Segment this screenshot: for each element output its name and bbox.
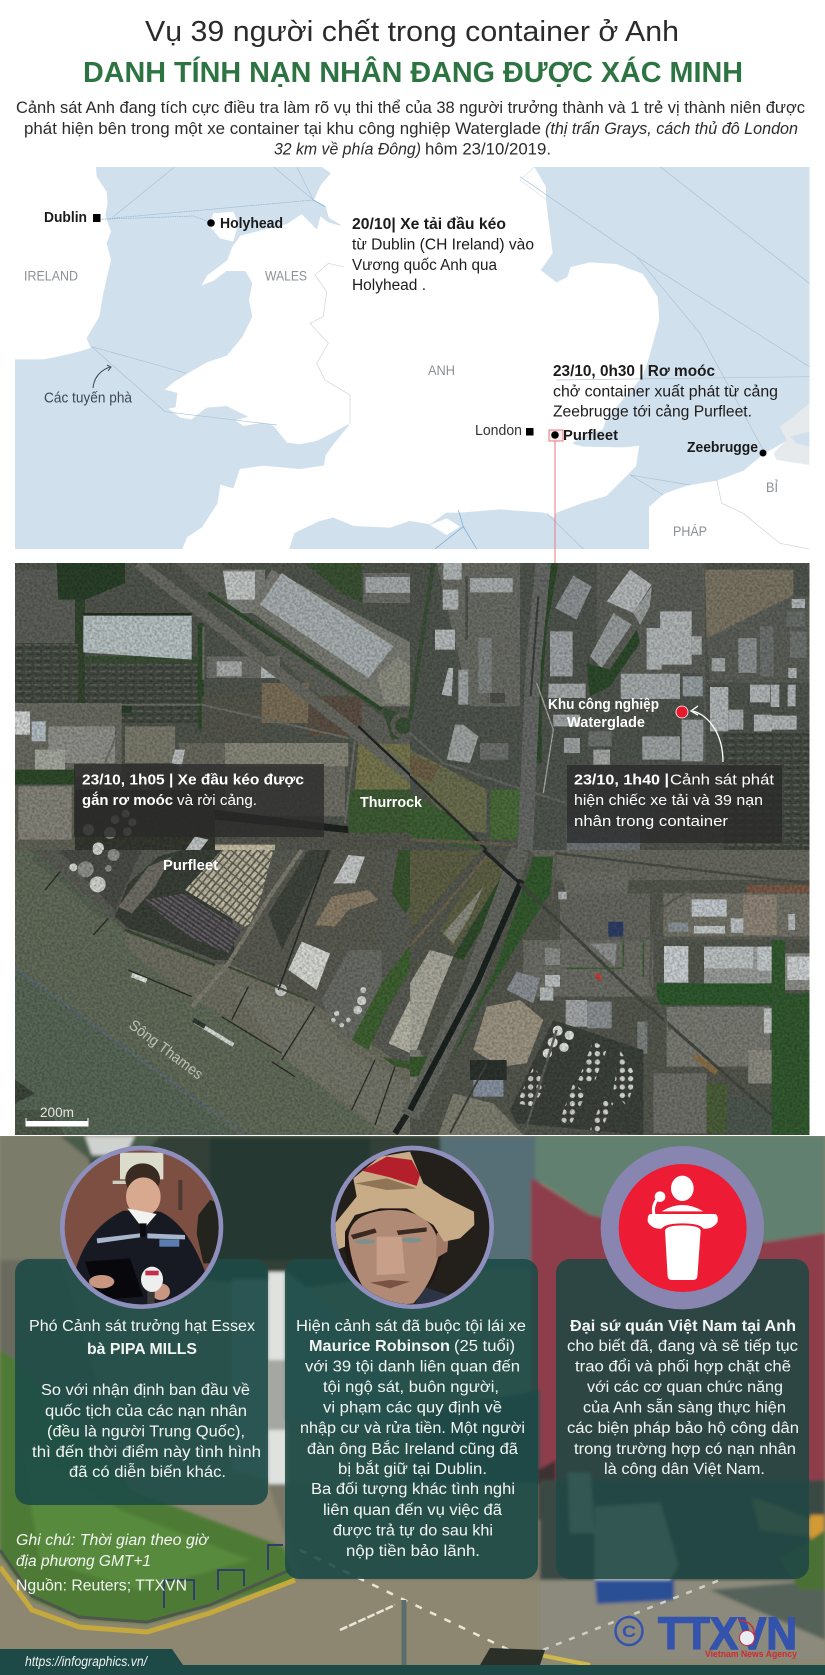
panel: driver charged: tội ngộ sát, buôn người, [323,1379,499,1396]
panel: Vietnam embassy [556,1259,809,1579]
panel: driver charged: Ba đối tượng khác tình nghi [311,1481,515,1498]
satellite imagery drawing [15,563,810,1140]
label: Dublin: Dublin [44,210,87,226]
label: England: ANH [428,362,455,378]
panel: driver charged: Maurice Robinson [309,1338,450,1355]
callout: 20/10 truck [352,216,534,294]
note and source: Nguồn: Reuters; TTXVN [16,1578,187,1594]
callout: 23/10 trailer: 23/10, 0h30 | Rơ moóc [553,363,715,380]
label: Purfleet with locator box and leader line: Purfleet [563,428,618,444]
panel: Pipa Mills statement: thì đến thời điểm này tình hình [32,1444,261,1461]
panel: driver charged [285,1259,538,1579]
label: Thurrock: Thurrock [360,794,423,811]
panel: driver charged: được trả tự do sau khi [333,1522,493,1540]
intro text block: (thị trấn Grays, cách thủ đô London [545,120,798,138]
callout: 20/10 truck: 20/10| Xe tải đầu kéo [352,216,506,233]
panel: Pipa Mills statement: Phó Cảnh sát trưởng hạt Essex [29,1318,255,1335]
panel: driver charged: (25 tuổi) [454,1338,515,1355]
label: Wales: WALES [265,268,307,284]
intro text block: hôm 23/10/2019. [425,140,551,158]
callout: 23/10 1h40 [567,765,782,843]
note and source [16,1532,210,1594]
panel: driver charged: nhập cư và rửa tiền. Một người [300,1420,525,1437]
panel: driver charged: với 39 tội danh liên quan đến [305,1358,520,1376]
label: London: London [475,423,522,439]
portrait: Pipa Mills [60,1146,223,1310]
panel: driver charged: liên quan đến vụ việc đã [323,1502,502,1519]
panel: Pipa Mills statement: đã có diễn biến khác. [69,1464,226,1481]
panel: driver charged: đàn ông Bắc Ireland cũng đã [307,1441,518,1458]
panel: Pipa Mills statement: So với nhận định ban đầu về [41,1382,250,1399]
label: Holyhead: Holyhead [220,216,283,232]
intro text block: 32 km về phía Đông) [274,140,421,158]
panel: Vietnam embassy: là công dân Việt Nam. [604,1461,765,1478]
callout: 20/10 truck: Vương quốc Anh qua [352,257,497,274]
callout: 23/10 1h40: hiện chiếc xe tải và 39 nạn [574,792,763,809]
label: ferry routes with arrow [44,365,133,406]
callout: 23/10 1h05: và rời cảng. [177,792,257,809]
panel: Pipa Mills statement: bà PIPA MILLS [87,1341,197,1358]
label: Waterglade industrial park: Waterglade [567,714,645,731]
callout: 20/10 truck: từ Dublin (CH Ireland) vào [352,236,534,254]
logo: TTXVN: C [622,1622,636,1641]
intro text block: Cảnh sát Anh đang tích cực điều tra làm rõ vụ thi thể của 38 người trưởng thành và 1 trẻ vị thành niên được [16,99,805,117]
panel: Vietnam embassy: trao đổi và phối hợp chặt chẽ [575,1358,791,1376]
label: ferry routes with arrow: Các tuyến phà [44,390,133,406]
callout: 23/10 1h40: 23/10, 1h40 | [574,772,669,788]
panel: Vietnam embassy: với các cơ quan chức năng [587,1379,783,1396]
panel: Vietnam embassy: trong trường hợp có nạn nhân [574,1441,796,1458]
panel: driver charged: vi phạm các quy định về [323,1400,502,1416]
scale bar [26,1105,88,1126]
callout: 20/10 truck: Holyhead . [352,277,426,294]
callout: 23/10 trailer [553,363,778,420]
label: Ireland: IRELAND [24,268,78,284]
panel: driver charged: Hiện cảnh sát đã buộc tội lái xe [296,1318,526,1335]
label: Zeebrugge: Zeebrugge [687,440,758,456]
panel: Vietnam embassy: Đại sứ quán Việt Nam tại Anh [570,1318,796,1335]
label: River Thames: Sông Thames [126,1017,206,1083]
logo: TTXVN: Vietnam News Agency [705,1649,797,1659]
panel: route map [15,167,810,564]
label: Belgium: BỈ [766,479,778,495]
panel: Pipa Mills statement: (đều là người Trung Quốc), [47,1424,245,1440]
panel: satellite map [15,563,810,1140]
panel: Vietnam embassy: của Anh sẵn sàng thực hiện [583,1400,786,1416]
footer bar with URL: https://infographics.vn/ [25,1654,148,1669]
footer bar with URL [0,1649,825,1675]
panel: scene photo background [0,1136,825,1675]
note and source: Ghi chú: Thời gian theo giờ [16,1532,210,1549]
callout: 23/10 1h40: nhân trong container [574,813,728,830]
panel: Pipa Mills statement: quốc tịch của các nạn nhân [45,1403,247,1420]
label: Waterglade industrial park [548,696,659,731]
icon: speaker at podium [601,1146,764,1309]
panel: Vietnam embassy: cho biết đã, đang và sẽ tiếp tục [567,1338,798,1355]
callout: 23/10 trailer: chở container xuất phát từ cảng [553,384,778,400]
map base geography [15,167,810,549]
title line 1: Vụ 39 người chết trong container ở Anh [145,16,679,48]
title line 2: DANH TÍNH NẠN NHÂN ĐANG ĐƯỢC XÁC MINH [83,55,743,89]
scale bar: 200m [40,1105,74,1120]
label: France: PHÁP [673,523,707,539]
callout: 23/10 1h05: gắn rơ moóc [82,791,173,809]
label: Purfleet: Purfleet [163,857,218,874]
label: Waterglade industrial park: Khu công nghiệp [548,696,659,713]
intro text block [16,99,805,158]
intro text block: phát hiện bên trong một xe container tại khu công nghiệp Waterglade [24,120,541,138]
callout: 23/10 1h05: 23/10, 1h05 | Xe đầu kéo được [82,772,304,788]
panel: Pipa Mills statement [15,1259,268,1505]
panel: driver charged: bị bắt giữ tại Dublin. [338,1461,487,1478]
marker with arrow [676,706,723,762]
callout: 23/10 1h05 [74,764,324,837]
logo: TTXVN: TTXVN [658,1608,797,1659]
title [83,16,743,89]
note and source: địa phương GMT+1 [16,1553,151,1570]
portrait: Maurice Robinson [330,1146,494,1310]
callout: 23/10 1h40: Cảnh sát phát [670,772,775,788]
label: Purfleet with locator box and leader line [549,428,618,564]
callout: 23/10 trailer: Zeebrugge tới cảng Purfleet. [553,404,752,420]
panel: Vietnam embassy: các biện pháp bảo hộ công dân [567,1420,799,1437]
panel: driver charged: nộp tiền bảo lãnh. [346,1543,480,1560]
